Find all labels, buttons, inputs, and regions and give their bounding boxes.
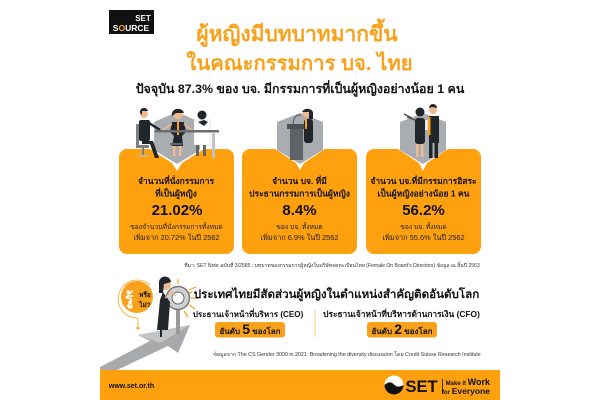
CFO ranking: ประธานเจ้าหน้าที่บริหารด้านการเงิน (CFO)	[323, 307, 480, 319]
icon: question bubble: รู้	[125, 290, 134, 310]
icon: question bubble: หรือ	[139, 291, 151, 299]
text: card 3 note	[382, 222, 465, 242]
source note: ที่มา: SET Note ฉบับที่ 3/2565 : บทบาทของกรรมการผู้หญิงในบริษัทจดทะเบียนไทย (Female On Board's Directors) ข้อมูล ณ สิ้นปี 2563	[184, 261, 480, 269]
CEO ranking: อันดับ 5 ของโลก	[219, 321, 281, 337]
text: card 1 heading: จำนวนที่นั่งกรรมการ	[138, 174, 214, 186]
CEO ranking	[193, 308, 304, 338]
icon: two professionals	[400, 104, 446, 164]
logo: SET Source	[109, 10, 154, 34]
title: ผู้หญิงมีบทบาทมากขึ้น	[196, 18, 398, 48]
data source note: ข้อมูลจาก The CS Gender 3000 in 2021: Broadening the diversity discussion โดย Credit Suisse Research Institute	[213, 351, 481, 358]
icon: question bubble: ไม่?	[138, 300, 151, 309]
subtitle: ปัจจุบัน 87.3% ของ บจ. มีกรรมการที่เป็นผู้หญิงอย่างน้อย 1 คน	[136, 80, 465, 97]
panel: board seats card	[119, 108, 234, 254]
text: card 3 note: ของ บจ. ทั้งหมด	[400, 222, 447, 231]
text: card 1 note	[130, 222, 223, 242]
text: card 2 heading: จำนวน บจ. ที่มี	[272, 174, 327, 186]
icon: speaker at podium	[277, 108, 323, 164]
tagline: Make it Work	[446, 377, 491, 387]
stat: 56.2%: 56.2%	[402, 202, 445, 219]
text: card 3 heading: จำนวน บจ.ที่มีกรรมการอิสระ	[370, 174, 477, 186]
text: card 1 heading: ที่เป็นผู้หญิง	[155, 186, 197, 200]
tagline: for Everyone	[442, 386, 490, 396]
icon: question bubble	[118, 280, 153, 330]
title	[186, 18, 413, 75]
text: card 2 note: เพิ่มจาก 6.9% ในปี 2562	[260, 232, 339, 242]
logo: SET	[384, 376, 438, 396]
CFO ranking: อันดับ 2 ของโลก	[371, 321, 433, 337]
text: card 1 note: ของจำนวนที่นั่งกรรมการทั้งหมด	[130, 222, 223, 231]
panel: independent directors card	[366, 104, 481, 254]
CFO ranking	[315, 307, 480, 338]
logo: SET Source: SOURCE	[113, 23, 150, 33]
title: ในคณะกรรมการ บจ. ไทย	[186, 51, 413, 75]
text: card 3 heading	[370, 174, 477, 200]
text: card 3 heading: เป็นผู้หญิงอย่างน้อย 1 คน	[378, 186, 470, 200]
logo: SET: SET	[405, 378, 438, 396]
stat: 21.02%: 21.02%	[152, 202, 202, 219]
logo: SET Source: SET	[135, 14, 151, 23]
CEO ranking: ประธานเจ้าหน้าที่บริหาร (CEO)	[193, 308, 304, 319]
text: card 2 note	[260, 222, 339, 242]
panel: board chair card	[242, 108, 357, 254]
website url: www.set.or.th	[108, 383, 154, 390]
heading: Thailand ranking: ประเทศไทยมีสัดส่วนผู้หญิงในตำแหน่งสำคัญติดอันดับโลก	[194, 286, 479, 302]
text: card 3 note: เพิ่มจาก 55.6% ในปี 2562	[382, 232, 465, 242]
footer band	[100, 370, 500, 400]
text: card 2 heading	[249, 174, 350, 200]
text: card 2 heading: ประธานกรรมการเป็นผู้หญิง	[249, 186, 350, 200]
stat: 8.4%: 8.4%	[282, 202, 317, 219]
icon: boardroom meeting	[136, 108, 219, 164]
text: card 2 note: ของ บจ. ทั้งหมด	[276, 222, 323, 231]
illustration: woman with clock on arrow	[100, 276, 199, 370]
tagline	[442, 377, 491, 396]
text: card 1 note: เพิ่มจาก 20.72% ในปี 2562	[133, 232, 220, 242]
text: card 1 heading	[138, 174, 214, 200]
